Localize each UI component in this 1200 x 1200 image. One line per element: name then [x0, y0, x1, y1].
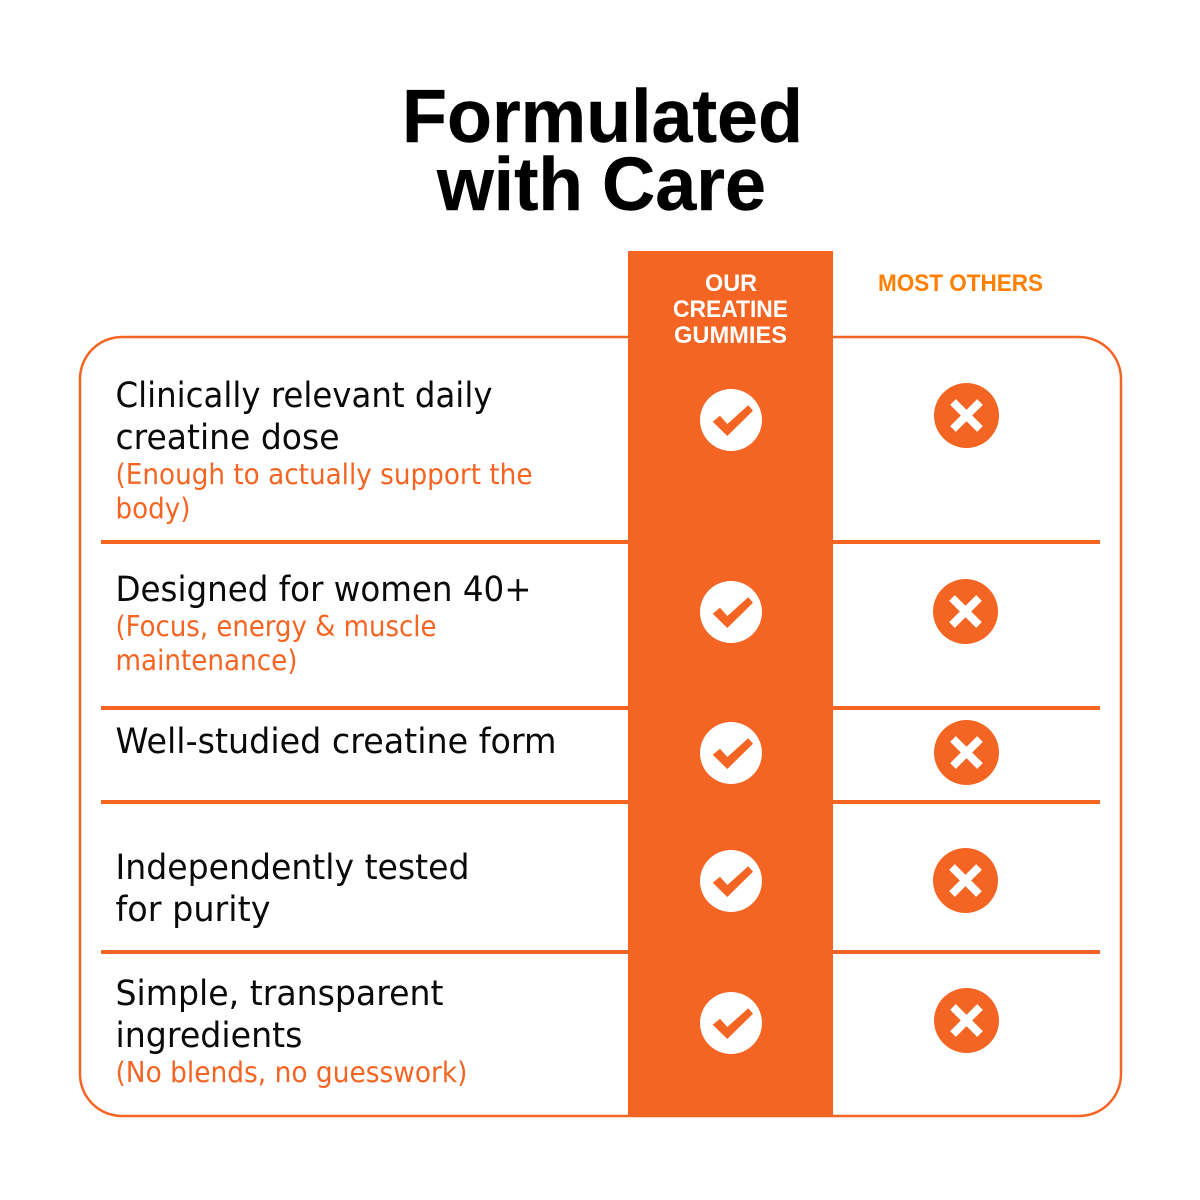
row 2 text: maintenance)	[116, 644, 298, 677]
icon: cross row 5	[934, 988, 999, 1053]
icon: cross row 4	[933, 848, 998, 913]
row 5 text	[116, 974, 468, 1089]
panel: comparison table outline	[80, 337, 1121, 1116]
row 1 text: creatine dose	[116, 418, 340, 458]
row 2 text	[116, 570, 532, 677]
icon: check row 1	[700, 389, 762, 451]
icon: check row 5	[700, 992, 762, 1054]
row 1 text: (Enough to actually support the	[116, 458, 532, 491]
title: Formulated	[402, 74, 803, 158]
row 3 text: Well-studied creatine form	[116, 722, 556, 762]
column heading: our creatine gummies: CREATINE	[673, 296, 788, 323]
row 5 text: (No blends, no guesswork)	[116, 1056, 468, 1089]
row dividers	[101, 540, 1100, 954]
row 1 text: body)	[116, 492, 190, 525]
panel: our creatine gummies column	[628, 251, 833, 1116]
icon: cross row 3	[934, 720, 999, 785]
row 4 text	[116, 848, 470, 930]
row 1 text: Clinically relevant daily	[116, 376, 492, 416]
row 4 text: for purity	[116, 890, 270, 930]
icon: cross row 2	[933, 579, 998, 644]
column heading: our creatine gummies	[673, 270, 788, 349]
icon: check row 3	[700, 722, 762, 784]
icon: check row 4	[700, 850, 762, 912]
row 4 text: Independently tested	[116, 848, 470, 888]
icon: check row 2	[700, 581, 762, 643]
column heading: our creatine gummies: OUR	[705, 270, 757, 297]
icon: cross row 1	[934, 383, 999, 448]
title: with	[436, 142, 583, 226]
title	[402, 74, 803, 226]
row 5 text: Simple, transparent	[116, 974, 444, 1014]
row 2 text: (Focus, energy & muscle	[116, 610, 436, 643]
row 1 text	[116, 376, 532, 525]
row 2 text: Designed for women 40+	[116, 570, 532, 610]
column heading: most others: MOST OTHERS	[878, 270, 1043, 297]
title: Care	[602, 142, 766, 226]
column heading: our creatine gummies: GUMMIES	[674, 322, 787, 349]
row 5 text: ingredients	[116, 1016, 302, 1056]
